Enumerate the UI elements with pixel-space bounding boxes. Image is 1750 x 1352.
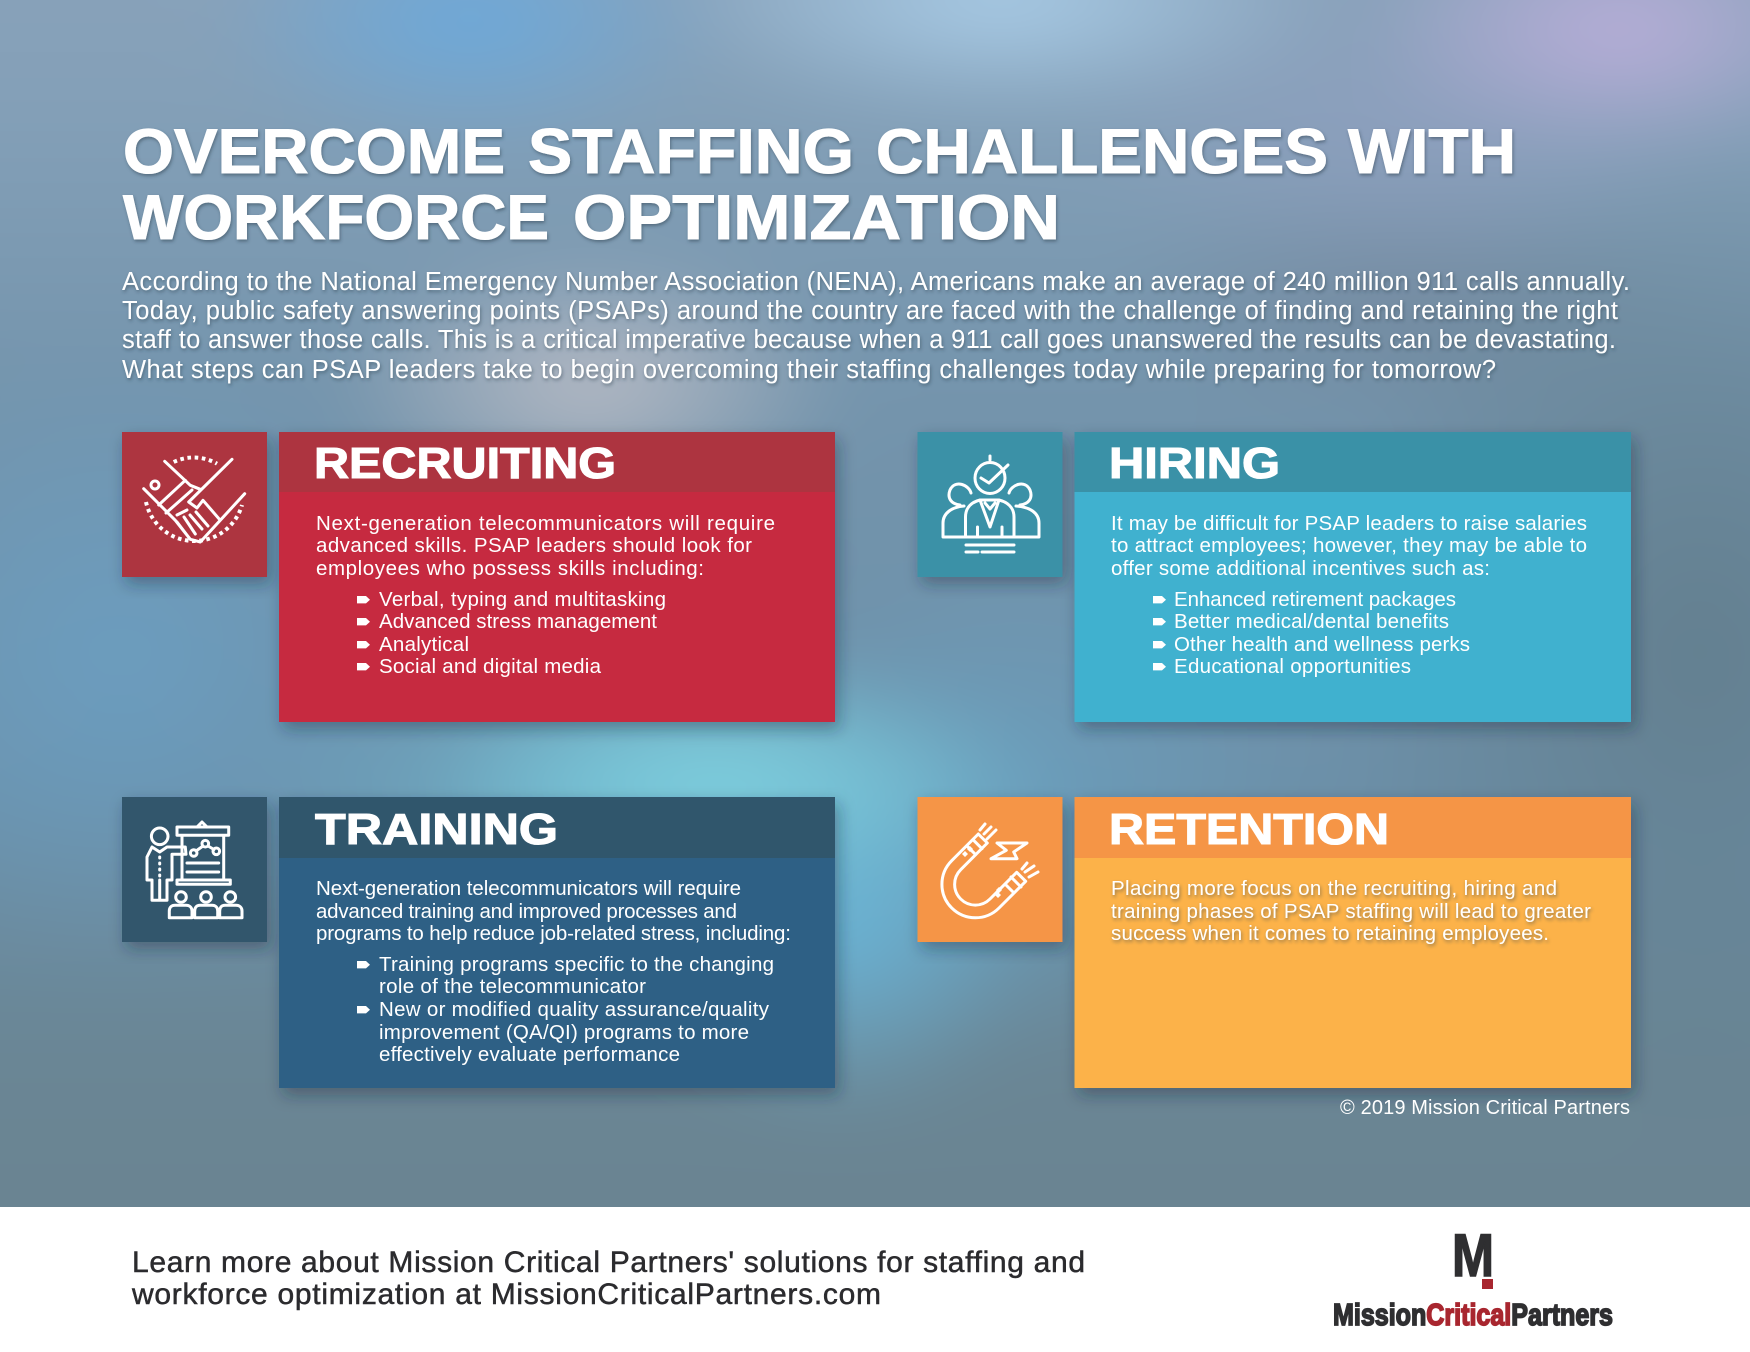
footer call to action: Learn more about Mission Critical Partners' solutions for staffing and [132, 1246, 1085, 1279]
training body text: programs to help reduce job-related stress, including: [316, 922, 791, 945]
panel: hiring [918, 432, 1631, 722]
logo: Mission Critical Partners [1333, 1222, 1613, 1332]
training heading: TRAINING [315, 805, 558, 854]
panel: retention [918, 797, 1631, 1088]
hiring body text: It may be difficult for PSAP leaders to raise salaries [1111, 512, 1587, 535]
hiring body text [1111, 512, 1587, 580]
intro paragraph: What steps can PSAP leaders take to begin overcoming their staffing challenges today while preparing for tomorrow? [122, 356, 1496, 384]
hiring body text: to attract employees; however, they may be able to [1111, 534, 1587, 557]
recruiting card [279, 432, 835, 722]
title [123, 117, 1516, 253]
copyright: © 2019 Mission Critical Partners [1340, 1097, 1630, 1119]
hiring bullet list: Better medical/dental benefits [1174, 610, 1449, 633]
retention heading: RETENTION [1109, 805, 1389, 854]
training body text: Next-generation telecommunicators will require [316, 877, 741, 900]
training bullet list: New or modified quality assurance/quality [379, 998, 770, 1021]
training bullet list [357, 953, 774, 1066]
retention body text: success when it comes to retaining employees. [1111, 922, 1549, 945]
hiring bullet list: Educational opportunities [1174, 655, 1411, 678]
intro paragraph [122, 268, 1630, 384]
title: OPTIMIZATION [573, 183, 1060, 253]
title: CHALLENGES [876, 117, 1328, 187]
title: WITH [1348, 117, 1516, 187]
retention body text: Placing more focus on the recruiting, hiring and [1111, 877, 1557, 900]
retention body text: training phases of PSAP staffing will lead to greater [1111, 900, 1591, 923]
hiring icon tile [918, 432, 1062, 577]
title: OVERCOME [123, 117, 505, 187]
hiring bullet list: Enhanced retirement packages [1174, 588, 1456, 611]
training icon tile [122, 797, 267, 942]
intro paragraph: According to the National Emergency Number Association (NENA), Americans make an average of 240 million 911 calls annually. [122, 268, 1630, 296]
training bullet list: Training programs specific to the changing [379, 953, 774, 976]
hiring card [1074, 432, 1631, 722]
training bullet list: effectively evaluate performance [379, 1043, 680, 1066]
recruiting bullet list: Verbal, typing and multitasking [379, 588, 666, 611]
hiring bullet list [1153, 588, 1470, 678]
intro paragraph: staff to answer those calls. This is a critical imperative because when a 911 call goes unanswered the results can be devastating. [122, 326, 1616, 354]
recruiting icon tile [122, 432, 267, 577]
recruiting bullet list: Advanced stress management [379, 610, 657, 633]
retention body text [1111, 877, 1591, 945]
recruiting bullet list [357, 588, 666, 678]
intro paragraph: Today, public safety answering points (PSAPs) around the country are faced with the challenge of finding and retaining the right [122, 297, 1618, 325]
recruiting body text: Next-generation telecommunicators will require [316, 512, 775, 535]
retention icon tile [918, 797, 1062, 942]
footer call to action: workforce optimization at MissionCriticalPartners.com [131, 1278, 881, 1311]
panel: training [122, 797, 835, 1088]
training body text [316, 877, 791, 945]
training body text: advanced training and improved processes and [316, 900, 737, 923]
recruiting heading: RECRUITING [314, 439, 616, 488]
hiring bullet list: Other health and wellness perks [1174, 633, 1470, 656]
footer band [0, 1207, 1750, 1352]
training bullet list: improvement (QA/QI) programs to more [379, 1021, 749, 1044]
recruiting bullet list: Analytical [379, 633, 469, 656]
title: STAFFING [528, 117, 854, 187]
training bullet list: role of the telecommunicator [379, 975, 646, 998]
hiring heading: HIRING [1109, 439, 1280, 488]
training card [279, 797, 835, 1088]
panel: recruiting [122, 432, 835, 722]
logo: Mission Critical Partners: MissionCriticalPartners [1333, 1297, 1613, 1332]
hiring body text: offer some additional incentives such as: [1111, 557, 1490, 580]
logo: Mission Critical Partners: M [1452, 1222, 1494, 1289]
title: WORKFORCE [123, 183, 549, 253]
recruiting body text: employees who possess skills including: [316, 557, 704, 580]
recruiting body text: advanced skills. PSAP leaders should look for [316, 534, 752, 557]
footer call to action [131, 1246, 1085, 1311]
recruiting bullet list: Social and digital media [379, 655, 602, 678]
recruiting body text [316, 512, 775, 580]
retention card [1074, 797, 1631, 1088]
